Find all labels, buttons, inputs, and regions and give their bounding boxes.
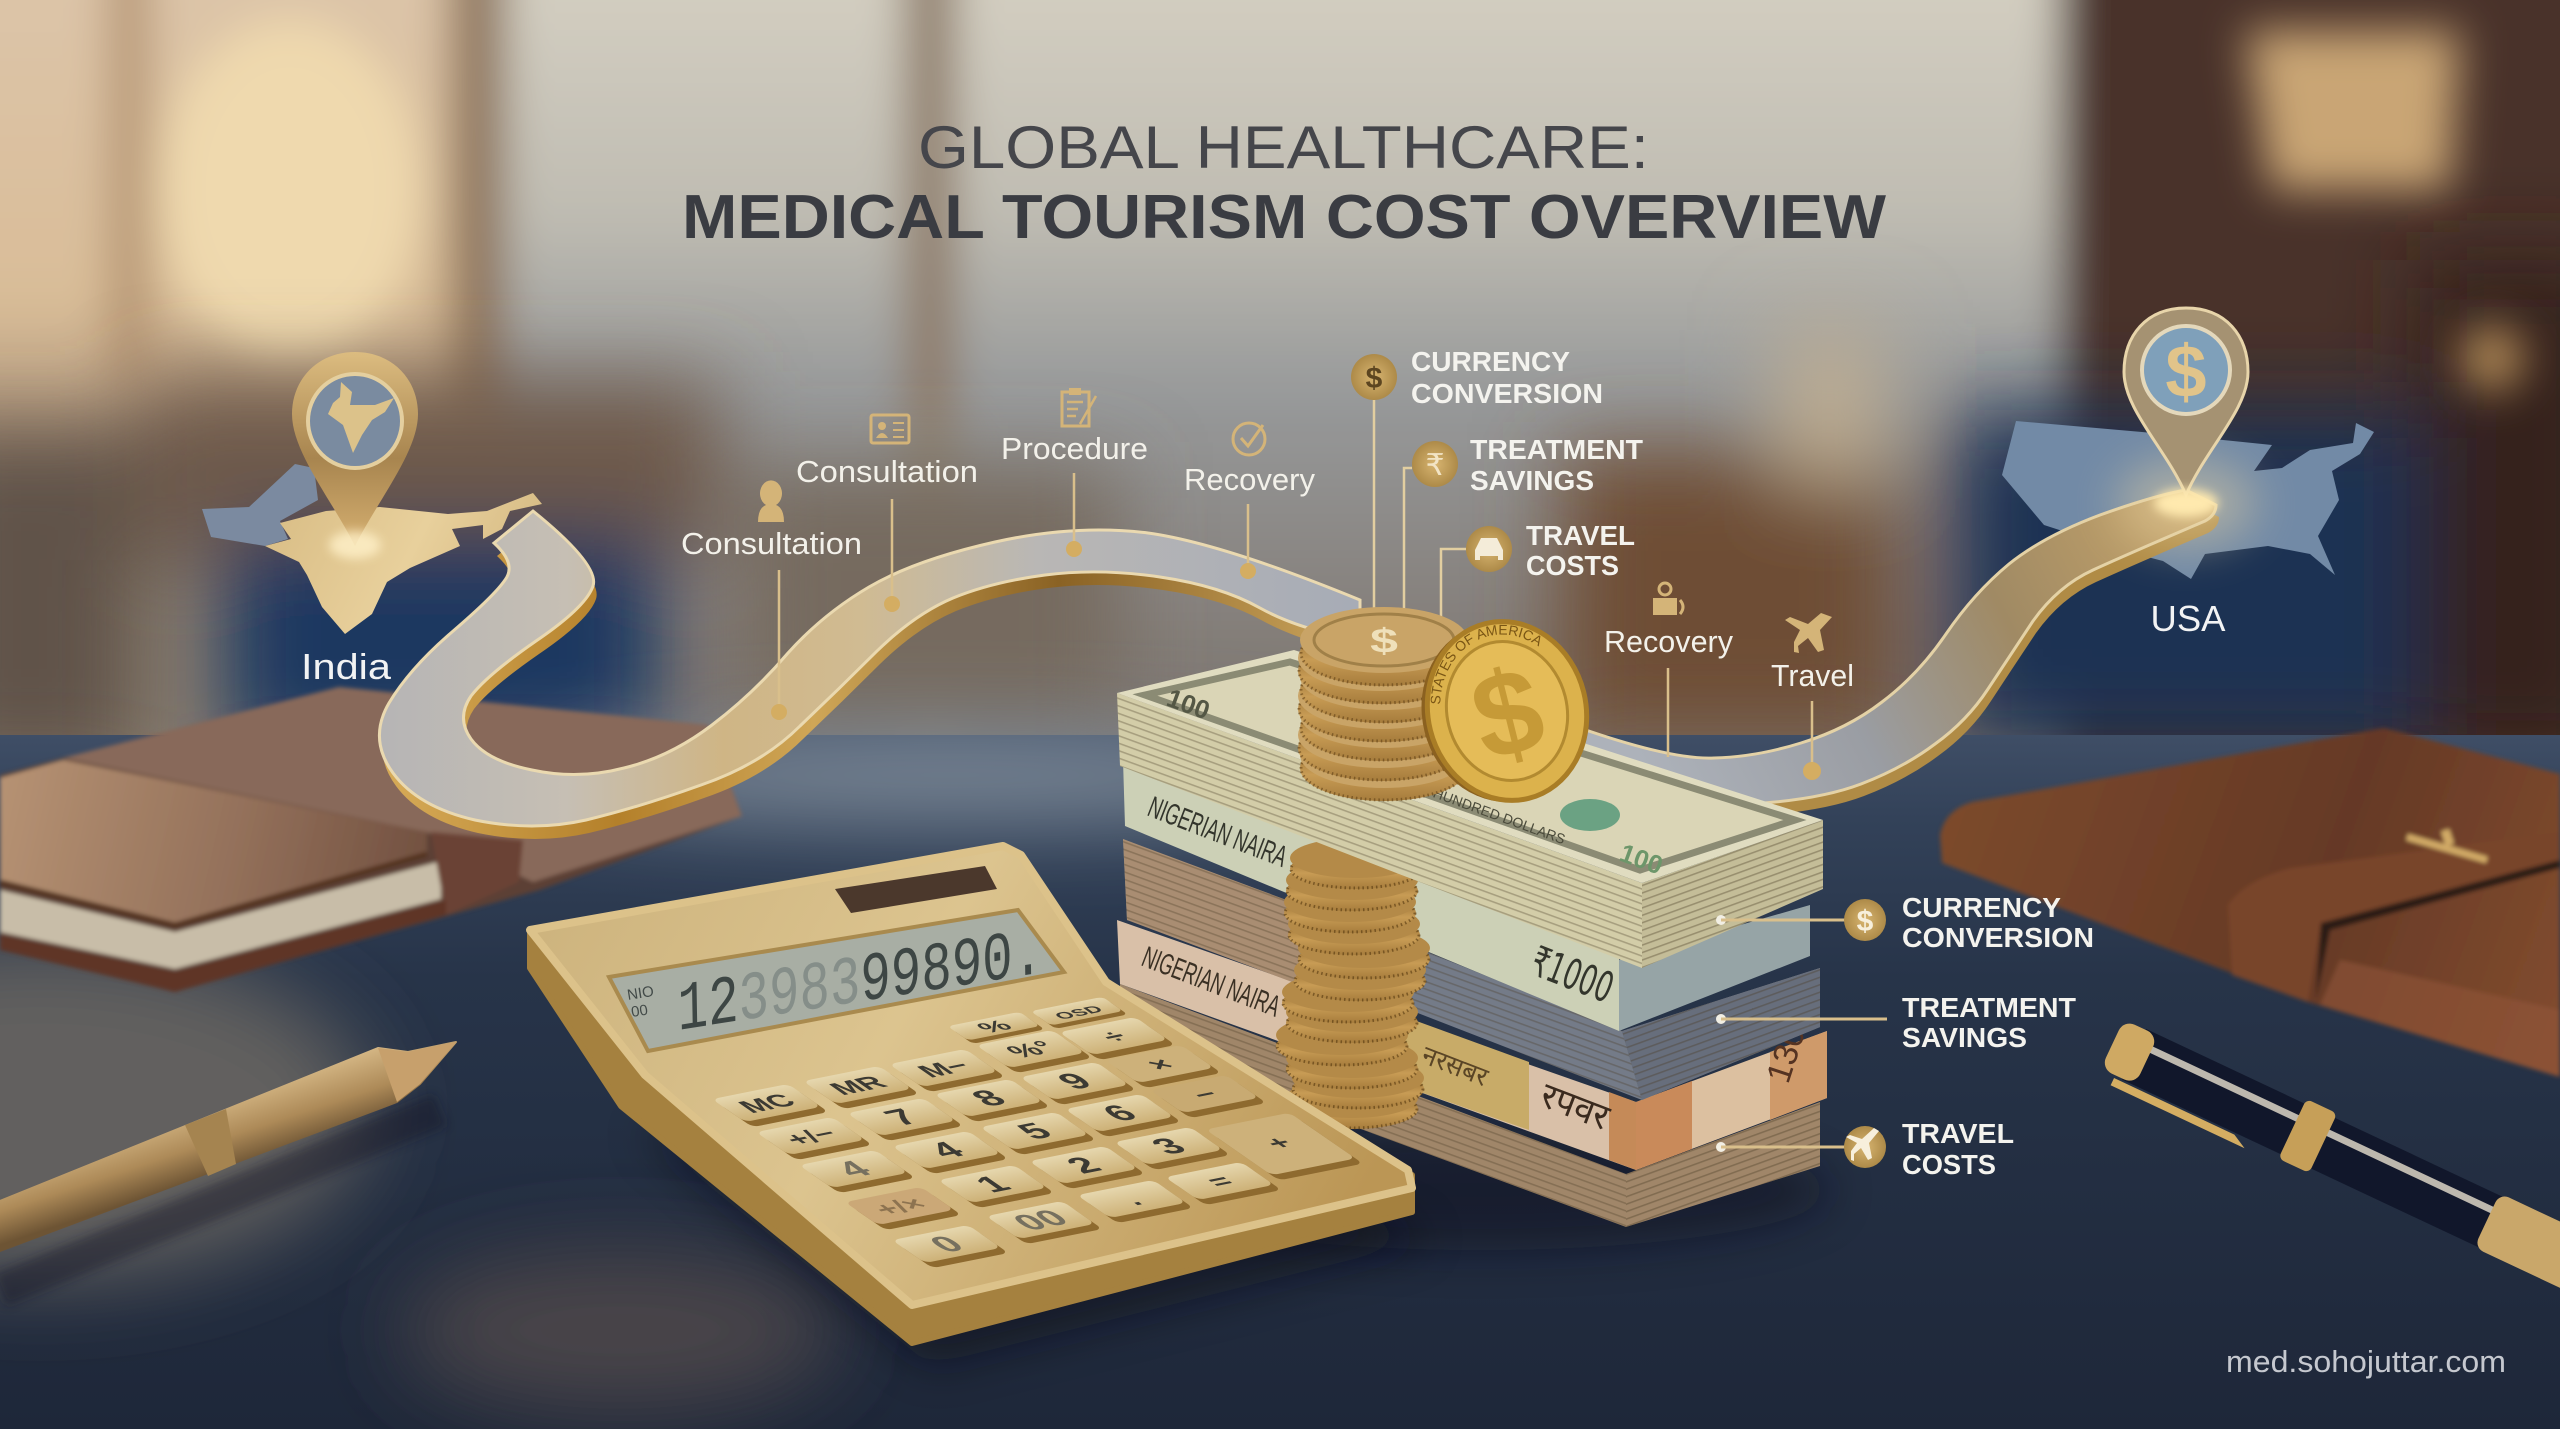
calculator keypad: 8 [962, 1085, 1015, 1111]
calculator keypad: 4 [920, 1137, 974, 1163]
callout: treatment savings (right): TREATMENT [1902, 992, 2076, 1023]
callout: treatment savings (right): SAVINGS [1902, 1022, 2027, 1053]
stack 4: orange rupee band: नरसबर [1417, 1035, 1495, 1094]
pin: India [292, 352, 418, 559]
step: consultation 2 [796, 415, 978, 612]
map: USA [2002, 421, 2374, 579]
step: procedure [1001, 388, 1148, 557]
callout: treatment savings (top): TREATMENT [1470, 434, 1643, 465]
pen: right [2096, 1014, 2560, 1308]
title: MEDICAL TOURISM COST OVERVIEW [682, 183, 1887, 252]
stack 2: green rupee band [1123, 760, 1810, 1031]
callout: currency conversion (top): $ [1366, 362, 1383, 395]
step: recovery 1: Recovery [1184, 462, 1315, 497]
calculator keypad: 9 [1048, 1068, 1101, 1094]
step: travel [1771, 613, 1854, 780]
calculator keypad [712, 997, 1363, 1268]
step: recovery 2 [1604, 583, 1733, 757]
stack 3: grey notes [1123, 839, 1820, 1100]
LCD display: 00 [630, 1002, 649, 1021]
callout: currency conversion (right) [1716, 892, 2094, 953]
money stacks [1117, 607, 1827, 1258]
table surface [0, 730, 2560, 1429]
callout: travel costs (top): COSTS [1526, 550, 1619, 581]
stack 2: green rupee band: NIGERIAN NAIRA [1143, 791, 1292, 874]
notebook: left [0, 687, 742, 992]
calculator keypad: 00 [1004, 1205, 1078, 1235]
calculator keypad: 6 [1093, 1100, 1146, 1126]
calculator keypad: = [1200, 1171, 1242, 1192]
calculator keypad: 0 [920, 1231, 973, 1257]
calculator keypad: M− [911, 1056, 978, 1082]
step: travel: Travel [1771, 658, 1854, 693]
callout: currency conversion (top): CONVERSION [1411, 378, 1603, 409]
watermark: med.sohojuttar.com [2226, 1344, 2506, 1379]
calculator body side [530, 930, 1412, 1343]
callout: currency conversion (top) [1351, 346, 1603, 615]
callout: treatment savings (right) [1716, 992, 2076, 1053]
label: USA: USA [2150, 598, 2226, 639]
ribbon: left journey path [379, 511, 1363, 839]
stack 5: bottom brown notes [1120, 984, 1820, 1227]
calculator keypad: − [1185, 1084, 1227, 1105]
stack 1: US dollar notes: 100 [1616, 837, 1667, 880]
callout: treatment savings (top) [1404, 434, 1643, 610]
step: recovery 2: Recovery [1604, 624, 1733, 659]
stack 1: US dollar notes [1117, 650, 1823, 968]
calculator keypad: OSD [1050, 1003, 1107, 1022]
callout: currency conversion (right): $ [1857, 905, 1874, 938]
calculator keypad: 5 [1008, 1118, 1061, 1144]
stack 4: orange rupee band: 1300 [1759, 1004, 1819, 1087]
calculator keypad: × [1140, 1054, 1182, 1075]
title [682, 114, 1887, 252]
large upright coin: $ [1459, 641, 1556, 787]
ribbon: right journey path [1580, 490, 2219, 816]
step: consultation 2: Consultation [796, 454, 978, 489]
LCD display: NIO [626, 983, 655, 1004]
callout: treatment savings (top): ₹ [1425, 448, 1445, 483]
notebook: right [1940, 728, 2560, 1077]
calculator keypad: 4 [827, 1156, 881, 1182]
title: GLOBAL HEALTHCARE: [918, 114, 1649, 181]
calculator keypad: ÷ [1094, 1027, 1135, 1047]
step: procedure: Procedure [1001, 431, 1148, 466]
stack 2: green rupee band: ₹1000 [1524, 937, 1620, 1012]
calculator keypad: MC [732, 1091, 804, 1117]
step: consultation 1 [681, 480, 862, 720]
large upright coin [1422, 619, 1590, 803]
calculator keypad: +/× [867, 1194, 935, 1220]
calculator keypad: 1 [966, 1171, 1019, 1197]
stack 1: US dollar notes: ONE HUNDRED DOLLARS [1399, 773, 1567, 847]
callout: travel costs (top): TRAVEL [1526, 520, 1635, 551]
stack 1: US dollar notes: 100 [1163, 682, 1214, 725]
calculator [530, 846, 1430, 1365]
callout: treatment savings (top): SAVINGS [1470, 465, 1594, 496]
calculator keypad: % [971, 1017, 1018, 1036]
calculator keypad: MR [823, 1073, 895, 1099]
callout: travel costs (right): TRAVEL [1902, 1118, 2014, 1149]
calculator keypad: +/− [778, 1124, 846, 1150]
callout: currency conversion (top): CURRENCY [1411, 346, 1570, 377]
callout: currency conversion (right): CURRENCY [1902, 892, 2061, 923]
LCD display: 12398399890. [677, 915, 1044, 1051]
stack 4: orange rupee band: रपवर [1534, 1067, 1619, 1141]
stack 4: orange rupee band [1117, 920, 1827, 1170]
callout: travel costs (right): COSTS [1902, 1149, 1996, 1180]
callout: currency conversion (right): CONVERSION [1902, 922, 2094, 953]
calculator keypad: . [1116, 1190, 1149, 1209]
solar panel [835, 866, 997, 913]
calculator top face [530, 846, 1412, 1305]
callout: travel costs (top) [1441, 520, 1635, 625]
calculator keypad: 7 [875, 1104, 928, 1130]
pen: left [0, 1042, 456, 1290]
stack 4: orange rupee band: NIGERIAN NAIRA [1137, 941, 1285, 1023]
label: India: India [301, 646, 392, 687]
upper coin stack [1298, 607, 1468, 801]
callout: travel costs (right) [1716, 1118, 2014, 1180]
calculator keypad: + [1258, 1133, 1301, 1154]
calculator keypad: 2 [1057, 1152, 1110, 1178]
upper coin stack: $ [1370, 622, 1398, 660]
step: consultation 1: Consultation [681, 526, 862, 561]
calculator keypad: %° [1000, 1037, 1064, 1062]
step: recovery 1 [1184, 423, 1315, 579]
calculator keypad: 3 [1142, 1133, 1195, 1159]
pin: USA: $ [2165, 330, 2207, 413]
large upright coin: STATES OF AMERICA [1430, 624, 1540, 704]
lower coin column [1276, 838, 1430, 1129]
map: India [202, 464, 542, 634]
pin: USA [2116, 308, 2256, 547]
